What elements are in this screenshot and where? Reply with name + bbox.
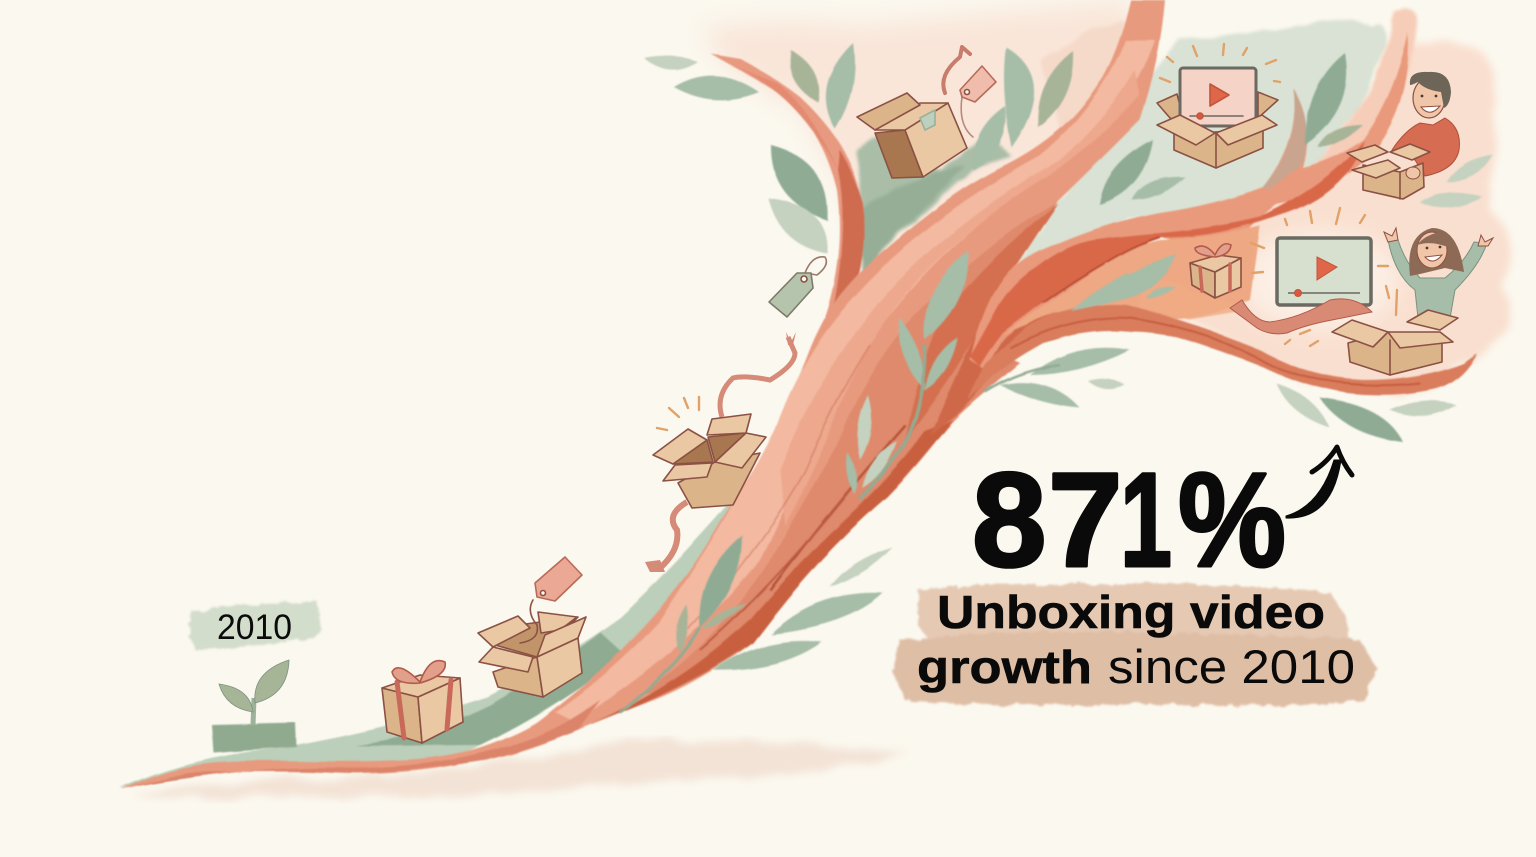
year label: 2010: 2010 (217, 608, 292, 647)
headline: 871%: 7 (1048, 446, 1123, 595)
ground shadow wash (130, 741, 912, 798)
caption: unboxing video growth since 2010: growth (917, 641, 1092, 693)
headline: 871%: % (1178, 446, 1286, 595)
panel: green wash behind video box (993, 20, 1385, 295)
icon: green price tag (769, 257, 826, 317)
icon: ribbon and open box (1230, 286, 1458, 375)
icon: video screen with play button (1251, 208, 1388, 305)
icon: closed box with pink tag (857, 47, 996, 178)
headline: 871%: 8 (972, 446, 1047, 595)
year label: 2010 (189, 602, 320, 650)
icon: wrapped gift box (382, 661, 463, 743)
icon: woman cheering (1384, 228, 1493, 318)
arrow: growth arrow (1286, 447, 1352, 518)
icon: open box with pink tag (478, 557, 586, 697)
icon: gift box small (1190, 244, 1241, 298)
panel: right branches (930, 33, 1477, 435)
panel: green ground ribbon (120, 470, 760, 788)
leaves outside and around the tree (620, 43, 1493, 713)
panel: left branch (710, 53, 864, 330)
caption brush background (892, 584, 1377, 705)
peach band right (1275, 9, 1418, 200)
icon: seedling sprout (212, 660, 297, 753)
caption: unboxing video growth since 2010: Unboxing video (937, 586, 1325, 638)
headline: 871%: 1 (1120, 446, 1172, 595)
panel: main trunk (122, 0, 1165, 789)
icon: man opening box (1347, 72, 1459, 199)
panel: green wash between branches (855, 135, 1010, 285)
panel: upper peach wash (700, 0, 1512, 395)
icon: video screen in box (1157, 44, 1280, 168)
icon: open box with ribbons (645, 332, 796, 572)
caption: unboxing video growth since 2010 (917, 586, 1355, 693)
caption: unboxing video growth since 2010: since 2010 (1108, 640, 1355, 693)
